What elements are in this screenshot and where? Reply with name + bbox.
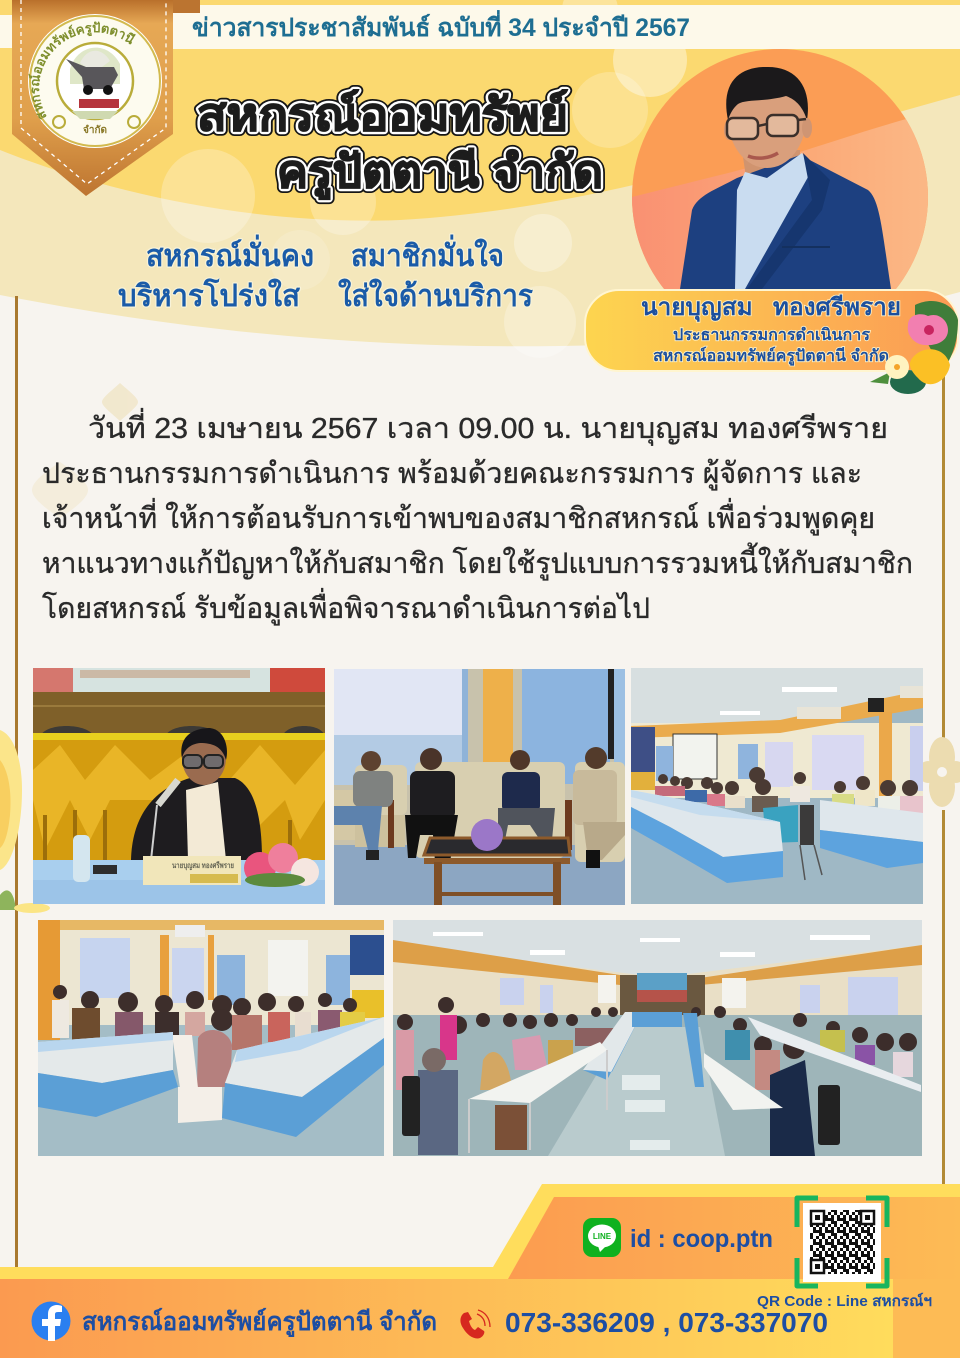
photo 4: members at tables: [38, 920, 384, 1156]
photo 5: wide meeting hall: [393, 920, 922, 1156]
name plate: [585, 290, 958, 371]
right people: [691, 1006, 917, 1059]
tables: [631, 790, 783, 857]
QR code: [797, 1198, 887, 1286]
icon: facebook: [32, 1302, 70, 1341]
QR caption: QR Code : Line สหกรณ์ฯ: [757, 1292, 932, 1310]
tables: [583, 1012, 634, 1072]
title: ครูปัตตานี จำกัด: [277, 146, 603, 200]
logo: [28, 14, 162, 148]
flower decoration: [870, 301, 958, 394]
name plate: ประธานกรรมการดำเนินการ: [673, 326, 870, 344]
article text: เจ้าหน้าที่ ให้การต้อนรับการเข้าพบของสมาชิกสหกรณ์ เพื่อร่วมพูดคุย: [42, 498, 875, 536]
article text: ประธานกรรมการดำเนินการ พร้อมด้วยคณะกรรมการ ผู้จัดการ และ: [42, 458, 862, 491]
jacket: [680, 155, 891, 289]
ornament right: [918, 737, 960, 807]
slogan: สหกรณ์มั่นคง: [146, 234, 314, 273]
chairman: [131, 778, 262, 860]
name plate: สหกรณ์ออมทรัพย์ครูปัตตานี จำกัด: [653, 346, 889, 367]
facebook contact: [32, 1302, 437, 1341]
icon: LINE: [583, 1218, 621, 1257]
slogan: ใส่ใจด้านบริการ: [338, 278, 533, 313]
top banner strip: ข่าวสารประชาสัมพันธ์ ฉบับที่ 34 ประจำปี 2567: [192, 10, 690, 42]
men: [361, 751, 381, 771]
facebook contact: สหกรณ์ออมทรัพย์ครูปัตตานี จำกัด: [82, 1307, 437, 1338]
logo: จำกัด: [83, 124, 107, 136]
photo 3: meeting room side view: [631, 668, 923, 904]
audience: [658, 767, 918, 796]
title: สหกรณ์ออมทรัพย์: [197, 89, 568, 140]
icon: LINE: LINE: [593, 1232, 612, 1241]
article text: วันที่ 23 เมษายน 2567 เวลา 09.00 น. นายบุญสม ทองศรีพราย: [88, 408, 888, 446]
head: [728, 68, 806, 168]
LINE contact: id : coop.ptn: [630, 1225, 773, 1253]
gold frame lines: [15, 296, 945, 1268]
title: [197, 89, 603, 200]
logo: สหกรณ์ออมทรัพย์ครูปัตตานี: [28, 22, 136, 120]
article text: หาแนวทางแก้ปัญหาให้กับสมาชิก โดยใช้รูปแบบการรวมหนี้ให้กับสมาชิก: [42, 542, 913, 581]
slogan: [118, 234, 533, 313]
footer: [0, 1184, 960, 1358]
title: สหกรณ์ออมทรัพย์: [197, 89, 568, 140]
ribbon with logo: [12, 0, 200, 196]
chairs: [402, 1076, 420, 1136]
name plate: นายบุญสม ทองศรีพราย: [641, 294, 901, 323]
article text: โดยสหกรณ์ รับข้อมูลเพื่อพิจารณาดำเนินการต่อไป: [42, 588, 650, 626]
slogan: บริหารโปร่งใส: [118, 277, 301, 313]
title: ครูปัตตานี จำกัด: [277, 146, 603, 200]
title: สหกรณ์ออมทรัพย์: [197, 89, 568, 140]
header background: [0, 0, 960, 358]
left flowers: [0, 730, 50, 913]
coffee table: [424, 838, 570, 855]
ornaments: [32, 383, 138, 518]
phone contact: 073-336209 , 073-337070: [505, 1307, 828, 1338]
crowd: [53, 985, 357, 1031]
left people: [397, 997, 618, 1034]
icon: phone: [460, 1310, 490, 1338]
slogan: สมาชิกมั่นใจ: [351, 234, 504, 273]
title: ครูปัตตานี จำกัด: [277, 146, 603, 200]
article text: [42, 408, 913, 626]
photo 2: four men on sofa: [334, 669, 625, 905]
LINE contact: [583, 1218, 773, 1257]
top banner strip: [0, 5, 960, 49]
neck: [742, 150, 800, 205]
photo 1: chairman at table: [33, 668, 325, 904]
portrait of chairman: [632, 49, 928, 289]
photo 1: chairman at table: นายบุญสม ทองศรีพราย: [172, 860, 234, 871]
